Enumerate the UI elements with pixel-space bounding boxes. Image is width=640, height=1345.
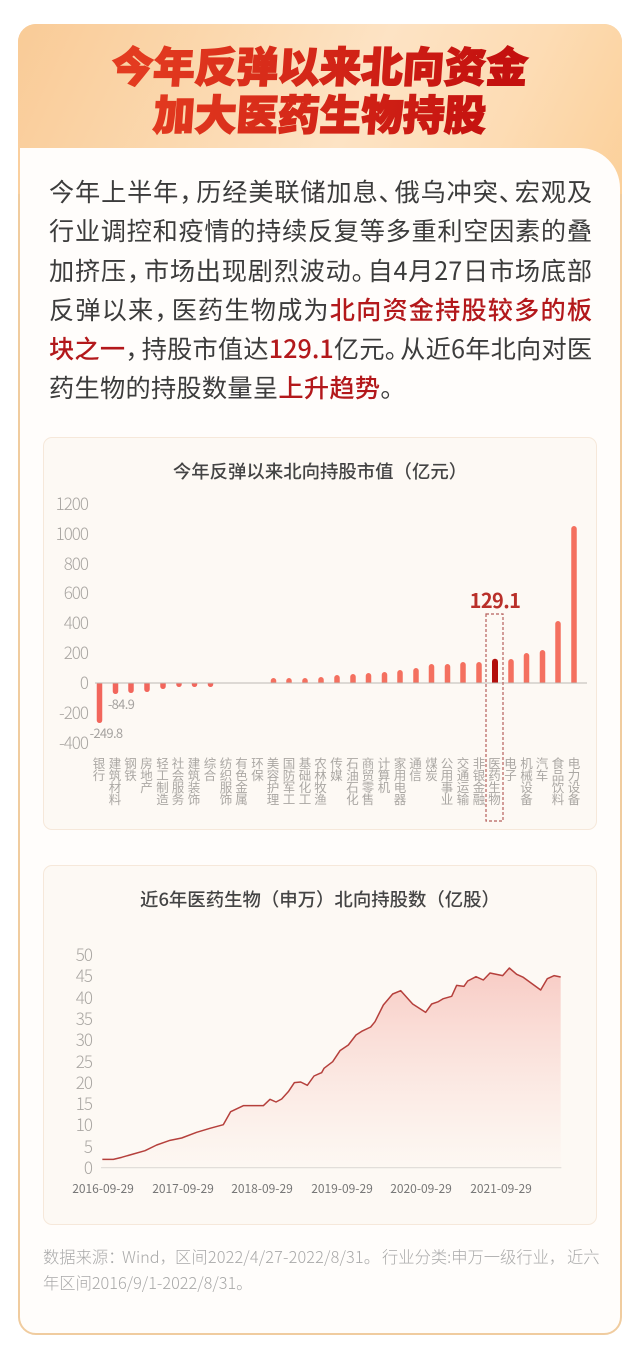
y axis labels: bar chart: 1000 xyxy=(56,520,88,545)
category labels: 煤炭 xyxy=(425,753,438,784)
x axis labels: line chart: 2016-09-29 xyxy=(72,1180,134,1197)
intro text: 行业调控和疫情的持续反复等多重利空因素的叠 xyxy=(49,212,592,248)
y axis labels: line chart: 50 xyxy=(76,940,92,966)
category labels: 银行 xyxy=(93,753,105,784)
y axis labels: bar chart: -200 xyxy=(59,699,88,724)
y axis labels: line chart: 5 xyxy=(84,1132,92,1158)
x axis labels: line chart: 2021-09-29 xyxy=(470,1180,532,1197)
source note: 年区间2016/9/1-2022/8/31。 xyxy=(43,1270,252,1294)
value label: -249.8: -249.8 xyxy=(90,723,122,742)
category labels: 美容护理 xyxy=(267,753,279,808)
category labels: 社会服务 xyxy=(172,753,184,808)
value label: -84.9: -84.9 xyxy=(108,694,134,713)
source note: 近六 xyxy=(567,1244,600,1268)
category labels: 非银金融 xyxy=(473,753,485,808)
category labels: 房地产 xyxy=(140,753,153,796)
y axis labels: bar chart xyxy=(56,490,88,754)
y axis labels: line chart: 0 xyxy=(84,1154,92,1178)
y axis labels: bar chart: 600 xyxy=(64,579,88,604)
intro text: 今年上半年，历经美联储加息、俄乌冲突、宏观及 xyxy=(49,173,592,209)
source note: 行业分类:申万一级行业， xyxy=(382,1244,565,1268)
x axis labels: line chart: 2017-09-29 xyxy=(152,1180,214,1197)
y axis labels: line chart: 10 xyxy=(76,1110,92,1136)
y axis labels: line chart: 30 xyxy=(76,1026,92,1050)
intro text: 药生物的持股数量呈上升趋势。 xyxy=(49,369,406,405)
category labels: 建筑材料 xyxy=(109,753,121,808)
value label: 129.1: 129.1 xyxy=(470,585,520,614)
y axis labels: line chart: 25 xyxy=(76,1048,92,1072)
category labels: 石油石化 xyxy=(346,753,359,808)
category labels: 机械设备 xyxy=(520,753,533,808)
x axis labels: line chart: 2018-09-29 xyxy=(231,1180,293,1197)
category labels: 电力设备 xyxy=(568,753,580,808)
y axis labels: bar chart: 200 xyxy=(64,639,88,664)
category labels: 环保 xyxy=(251,753,264,784)
category labels: 交通运输 xyxy=(457,753,469,808)
panel: line chart of northbound share count xyxy=(43,865,597,1225)
y axis labels: bar chart: 1200 xyxy=(56,490,88,515)
category labels: 轻工制造 xyxy=(156,753,169,808)
source note xyxy=(43,1244,600,1294)
category labels: 商贸零售 xyxy=(362,753,374,808)
category labels xyxy=(93,753,580,808)
intro text: 块之一，持股市值达129.1亿元。从近6年北向对医 xyxy=(49,330,592,366)
category labels: 农林牧渔 xyxy=(314,753,327,808)
highlight box xyxy=(486,614,503,821)
category labels: 家用电器 xyxy=(394,753,406,808)
category labels: 基础化工 xyxy=(299,753,311,808)
x axis labels: line chart xyxy=(72,1180,532,1197)
category labels: 综合 xyxy=(204,753,216,784)
category labels: 钢铁 xyxy=(124,753,137,784)
intro text xyxy=(49,173,592,405)
intro text: 反弹以来，医药生物成为北向资金持股较多的板 xyxy=(49,291,592,327)
category labels: 医药生物 xyxy=(488,753,501,808)
area line chart xyxy=(101,967,562,1168)
y axis labels: line chart: 15 xyxy=(76,1090,92,1114)
category labels: 食品饮料 xyxy=(552,753,564,808)
x axis labels: line chart: 2020-09-29 xyxy=(390,1180,452,1197)
y axis labels: bar chart: 0 xyxy=(80,669,88,694)
heading: line chart title: 近6年医药生物（申万）北向持股数（亿股） xyxy=(140,886,500,912)
x axis labels: line chart: 2019-09-29 xyxy=(311,1180,373,1197)
source note: 数据来源： xyxy=(43,1244,124,1268)
title xyxy=(110,34,530,142)
y axis labels: bar chart: 400 xyxy=(64,609,88,634)
y axis labels: line chart: 35 xyxy=(76,1004,92,1030)
intro text: 加挤压，市场出现剧烈波动。自4月27日市场底部 xyxy=(49,252,592,288)
category labels: 汽车 xyxy=(536,753,548,784)
heading: bar chart title: 今年反弹以来北向持股市值（亿元） xyxy=(173,458,467,484)
category labels: 建筑装饰 xyxy=(188,753,200,808)
y axis labels: bar chart: 800 xyxy=(64,550,88,575)
header banner xyxy=(18,24,622,194)
category labels: 电子 xyxy=(504,753,517,784)
category labels: 公用事业 xyxy=(441,753,453,808)
body background xyxy=(20,148,620,268)
panel: bar chart of northbound holdings value xyxy=(43,437,597,830)
y axis labels: line chart: 40 xyxy=(76,984,92,1008)
y axis labels: line chart: 45 xyxy=(76,962,92,986)
title: 今年反弹以来北向资金 xyxy=(110,34,530,94)
y axis labels: bar chart: -400 xyxy=(59,729,88,754)
bar chart xyxy=(95,526,587,822)
category labels: 国防军工 xyxy=(283,753,295,808)
category labels: 通信 xyxy=(409,753,422,784)
y axis labels: line chart: 20 xyxy=(76,1068,92,1094)
highlighted bar: 医药生物 xyxy=(492,658,498,682)
source note: Wind， xyxy=(122,1244,176,1268)
category labels: 有色金属 xyxy=(235,753,248,808)
source note: 区间2022/4/27-2022/8/31。 xyxy=(175,1244,380,1268)
title: 加大医药生物持股 xyxy=(152,82,488,142)
y axis labels: line chart xyxy=(76,940,92,1178)
category labels: 计算机 xyxy=(378,753,390,796)
category labels: 传媒 xyxy=(330,753,343,784)
category labels: 纺织服饰 xyxy=(220,753,232,808)
